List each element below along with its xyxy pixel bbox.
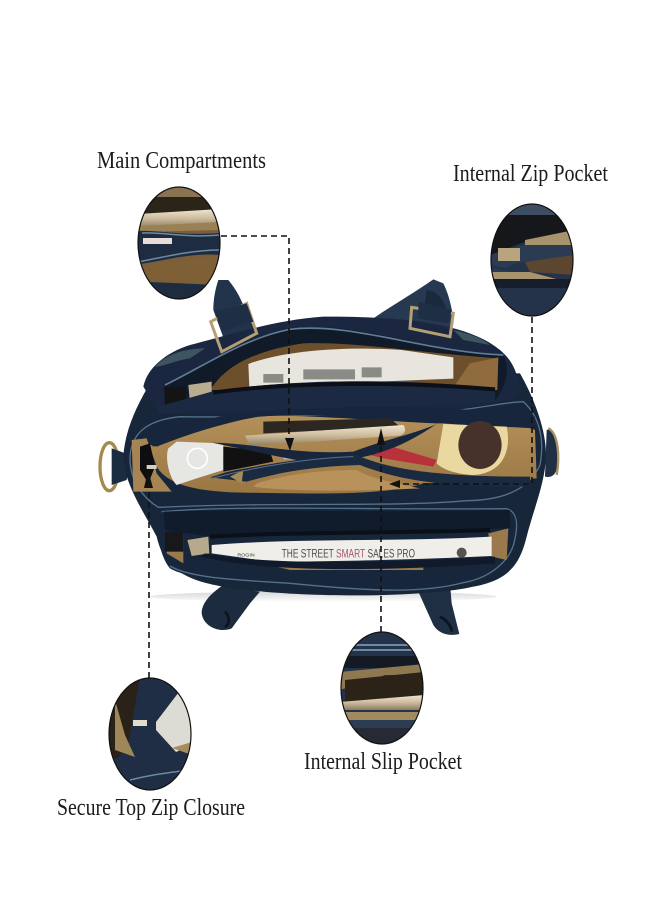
dashed arrow: main compartments: [221, 236, 294, 451]
gold side ring: [100, 428, 559, 491]
inner zip pocket: [212, 424, 437, 478]
middle compartment: [125, 400, 544, 510]
white box: [248, 349, 453, 387]
white bottle: [167, 442, 223, 485]
gold buckles on rear handles: [211, 302, 453, 352]
bottom compartment: ROGIN: [237, 553, 255, 559]
tan interior: [133, 416, 537, 494]
phone: [263, 418, 400, 433]
bottom compartment: [157, 506, 518, 592]
book title: THE STREET SMART SALES PRO: [282, 546, 415, 560]
ground shadow: [150, 591, 497, 602]
heading: secure top zip closure: Secure Top Zip Closure: [57, 795, 245, 821]
heading: main compartments: Main Compartments: [97, 148, 266, 174]
heading: internal zip pocket: Internal Zip Pocket: [453, 161, 608, 187]
dashed arrow: internal slip pocket: [377, 428, 385, 632]
white book: [212, 537, 492, 562]
rear felt panel: [143, 317, 520, 413]
left zip end: [140, 443, 155, 483]
red item: [357, 445, 437, 467]
detail circle: secure top zip closure: [108, 678, 192, 790]
detail circle: internal zip pocket: [490, 204, 574, 316]
dashed arrow: internal zip pocket: [389, 317, 532, 488]
heading: internal slip pocket: Internal Slip Pocket: [304, 749, 462, 775]
cream mug with brown ball: [437, 424, 508, 475]
bag body: [123, 370, 546, 595]
front handle tabs: [202, 583, 459, 635]
detail circle: main compartments: [138, 187, 220, 299]
dashed arrow: secure top zip closure: [144, 470, 153, 678]
detail circle: internal slip pocket: [340, 632, 424, 744]
interior tan: [165, 528, 508, 570]
top compartment: [158, 327, 507, 413]
handbag photo: [100, 279, 559, 635]
rear handle tabs: [213, 279, 453, 347]
